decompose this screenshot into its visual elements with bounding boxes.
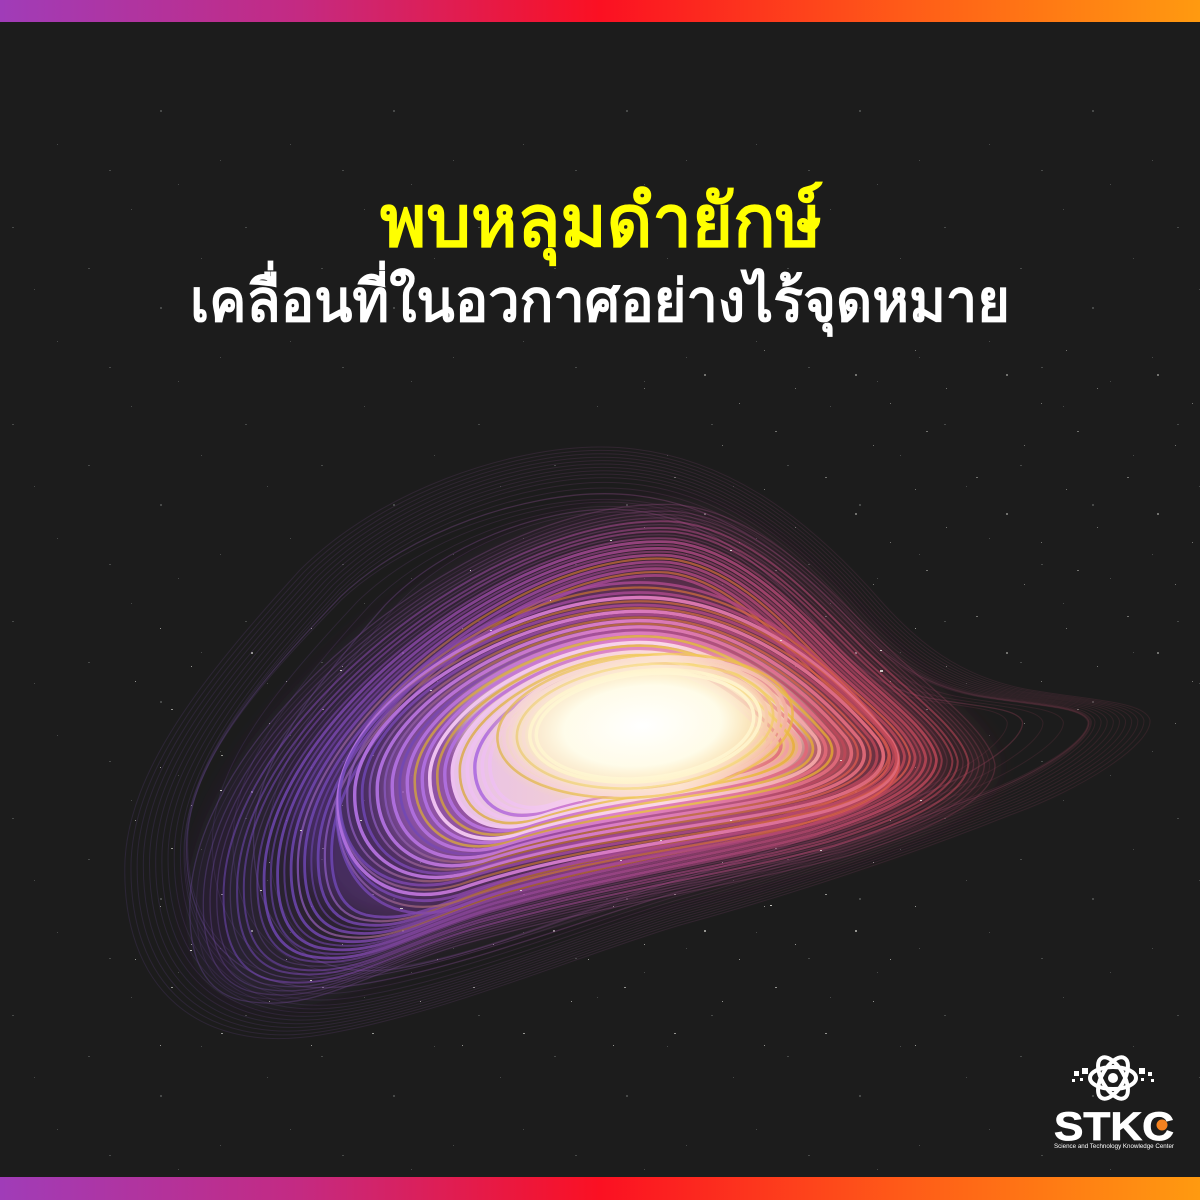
glowing core [478,632,807,819]
logo orange dot [1156,1120,1168,1130]
logo tagline: Science and Technology Knowledge Center [1054,1144,1174,1150]
faint outer rings [125,447,1150,1039]
galaxy sparkles [190,540,922,981]
title: white subheading: เคลื่อนที่ในอวกาศอย่างไร้จุดหมาย [190,260,1010,338]
bright inner rings [340,605,896,885]
title: yellow heading: พบหลุมดำยักษ์ [380,181,824,267]
top gradient bar [0,0,1200,22]
spiral galaxy [125,447,1150,1039]
bottom gradient bar [0,1177,1200,1200]
logo: STKC [1054,1053,1174,1150]
logo wordmark: STKC [1054,1105,1174,1149]
icon: atom [1072,1053,1154,1103]
purple mid rings [224,521,968,983]
galaxy glow [190,504,995,1003]
